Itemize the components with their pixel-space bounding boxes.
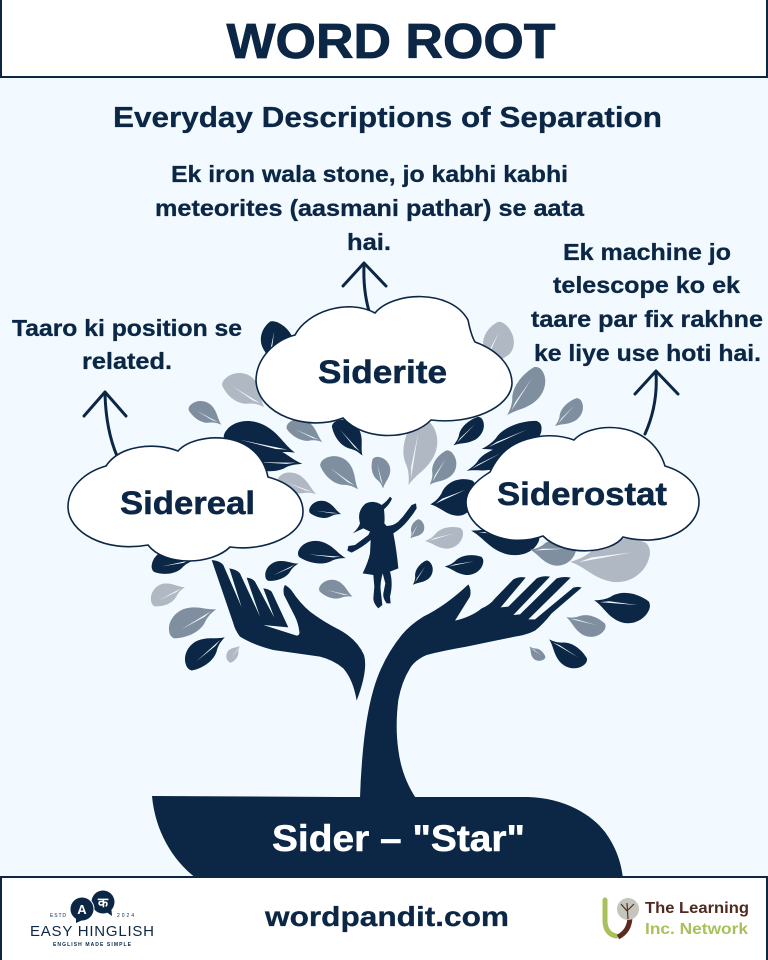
arrow: to Siderite bbox=[343, 263, 386, 311]
text: Siderite meaning: meteorites (aasmani pathar) se aata bbox=[155, 195, 584, 221]
logo: Easy Hinglish: क bbox=[97, 895, 109, 910]
trunk with right hand branch bbox=[360, 576, 582, 798]
text: Siderostat meaning bbox=[531, 239, 763, 366]
cloud: Siderite: Siderite bbox=[318, 354, 447, 390]
root base: Sider - "Star" bbox=[152, 796, 623, 878]
text: Siderite meaning: hai. bbox=[347, 229, 391, 255]
logo: Easy Hinglish: EASY HINGLISH bbox=[30, 923, 154, 940]
logo: Easy Hinglish bbox=[30, 890, 154, 948]
left hand branch bbox=[212, 560, 365, 701]
logo: Easy Hinglish: ENGLISH MADE SIMPLE bbox=[53, 942, 132, 948]
logo: The Learning Inc. Network: Inc. Network bbox=[645, 921, 748, 938]
logo: The Learning Inc. Network bbox=[605, 898, 749, 938]
footer bar bbox=[1, 877, 767, 960]
text: Sidereal meaning: related. bbox=[82, 348, 172, 374]
logo: Easy Hinglish: 2024 bbox=[117, 913, 134, 919]
cloud: Sidereal bbox=[68, 438, 303, 561]
arrow: to Sidereal bbox=[84, 392, 126, 456]
text: Siderite meaning bbox=[155, 161, 584, 255]
header: word root: WORD ROOT bbox=[226, 15, 556, 69]
text: Siderostat meaning: Ek machine jo bbox=[563, 239, 731, 265]
root base: Sider - "Star": Sider – "Star" bbox=[272, 818, 525, 859]
cloud: Siderite bbox=[256, 297, 512, 436]
text: Sidereal meaning bbox=[12, 315, 242, 374]
text: Sidereal meaning: Taaro ki position se bbox=[12, 315, 242, 341]
text: Siderostat meaning: ke liye use hoti hai. bbox=[534, 340, 761, 366]
child silhouette bbox=[347, 497, 417, 608]
cloud: Siderostat: Siderostat bbox=[497, 476, 667, 512]
text: Siderite meaning: Ek iron wala stone, jo kabhi kabhi bbox=[171, 161, 568, 187]
subtitle: Everyday Descriptions of Separation bbox=[113, 102, 662, 134]
arrow: to Siderostat bbox=[635, 371, 678, 434]
cloud: Siderostat bbox=[466, 428, 699, 551]
cloud: Sidereal: Sidereal bbox=[120, 485, 255, 521]
logo: The Learning Inc. Network: The Learning bbox=[645, 900, 749, 917]
text: Siderostat meaning: taare par fix rakhne bbox=[531, 306, 763, 332]
logo: Easy Hinglish: A bbox=[77, 902, 87, 917]
tree leaves bbox=[147, 318, 652, 675]
website: wordpandit.com bbox=[264, 901, 509, 932]
header: word root bbox=[1, 0, 767, 77]
logo: Easy Hinglish: ESTD bbox=[50, 913, 66, 919]
text: Siderostat meaning: telescope ko ek bbox=[553, 272, 740, 298]
